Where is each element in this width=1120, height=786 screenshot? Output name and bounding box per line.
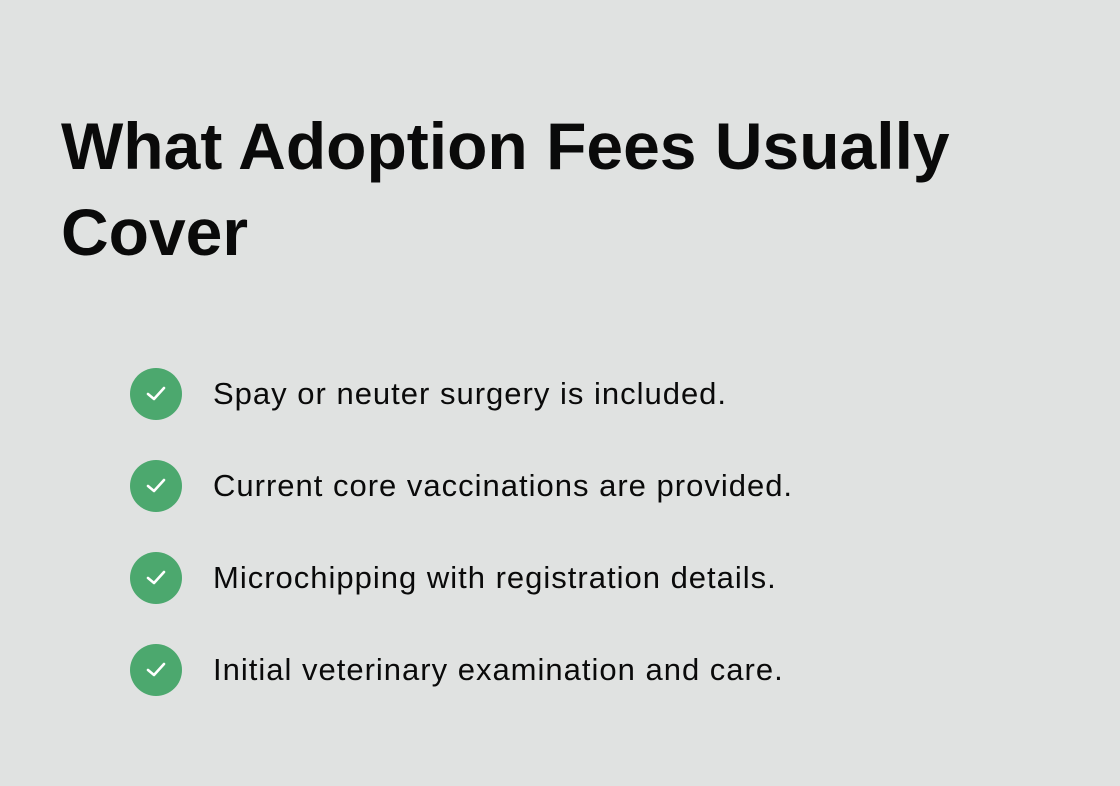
list item: vaccinations	[130, 460, 793, 512]
icon: check circle	[130, 368, 182, 420]
text: Current core vaccinations are provided.	[213, 468, 793, 503]
icon: check circle	[130, 460, 182, 512]
title	[61, 109, 950, 269]
list item: microchipping	[130, 552, 777, 604]
title: What Adoption Fees Usually	[61, 109, 950, 183]
text: Microchipping with registration details.	[213, 560, 777, 595]
text: Initial veterinary examination and care.	[213, 652, 784, 687]
text: Spay or neuter surgery is included.	[213, 376, 727, 411]
list item: vet exam	[130, 644, 784, 696]
title: Cover	[61, 195, 248, 269]
icon: check circle	[130, 644, 182, 696]
icon: check circle	[130, 552, 182, 604]
list item: spay/neuter	[130, 368, 727, 420]
